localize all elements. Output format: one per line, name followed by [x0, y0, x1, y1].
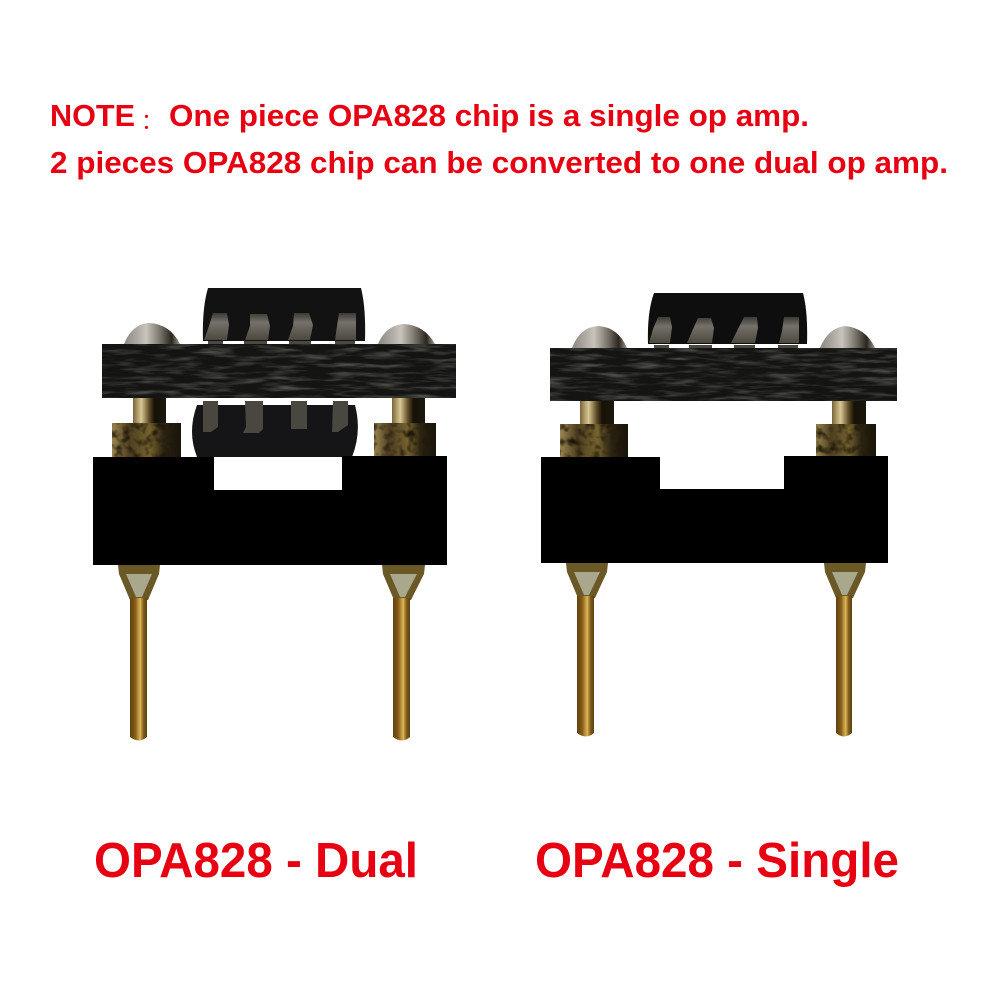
top chip, dual [203, 288, 365, 344]
pins, single [566, 563, 866, 736]
posts and collars, dual [112, 398, 436, 458]
label: OPA828 - Single: OPA828 - Single [535, 834, 899, 888]
note text [50, 98, 948, 180]
note text: 2 pieces OPA828 chip can be converted to one dual op amp. [50, 145, 948, 180]
pins, dual [118, 565, 425, 740]
screw heads, single [572, 326, 627, 348]
note text: One piece OPA828 chip is a single op amp. [169, 98, 809, 133]
label: OPA828 - Dual: OPA828 - Dual [94, 834, 418, 888]
circuit board, dual [102, 344, 456, 398]
circuit board, single [550, 348, 897, 401]
screw heads, dual [124, 323, 180, 344]
single op amp assembly [541, 293, 897, 736]
dual op amp assembly [93, 288, 456, 740]
base with notch, single [541, 456, 888, 563]
bottom chip, dual [192, 398, 358, 457]
note text: NOTE [50, 98, 135, 133]
note text: ： [141, 109, 163, 134]
posts and collars, single [560, 401, 876, 458]
top chip, single [648, 293, 807, 348]
base with notch, dual [93, 456, 447, 565]
